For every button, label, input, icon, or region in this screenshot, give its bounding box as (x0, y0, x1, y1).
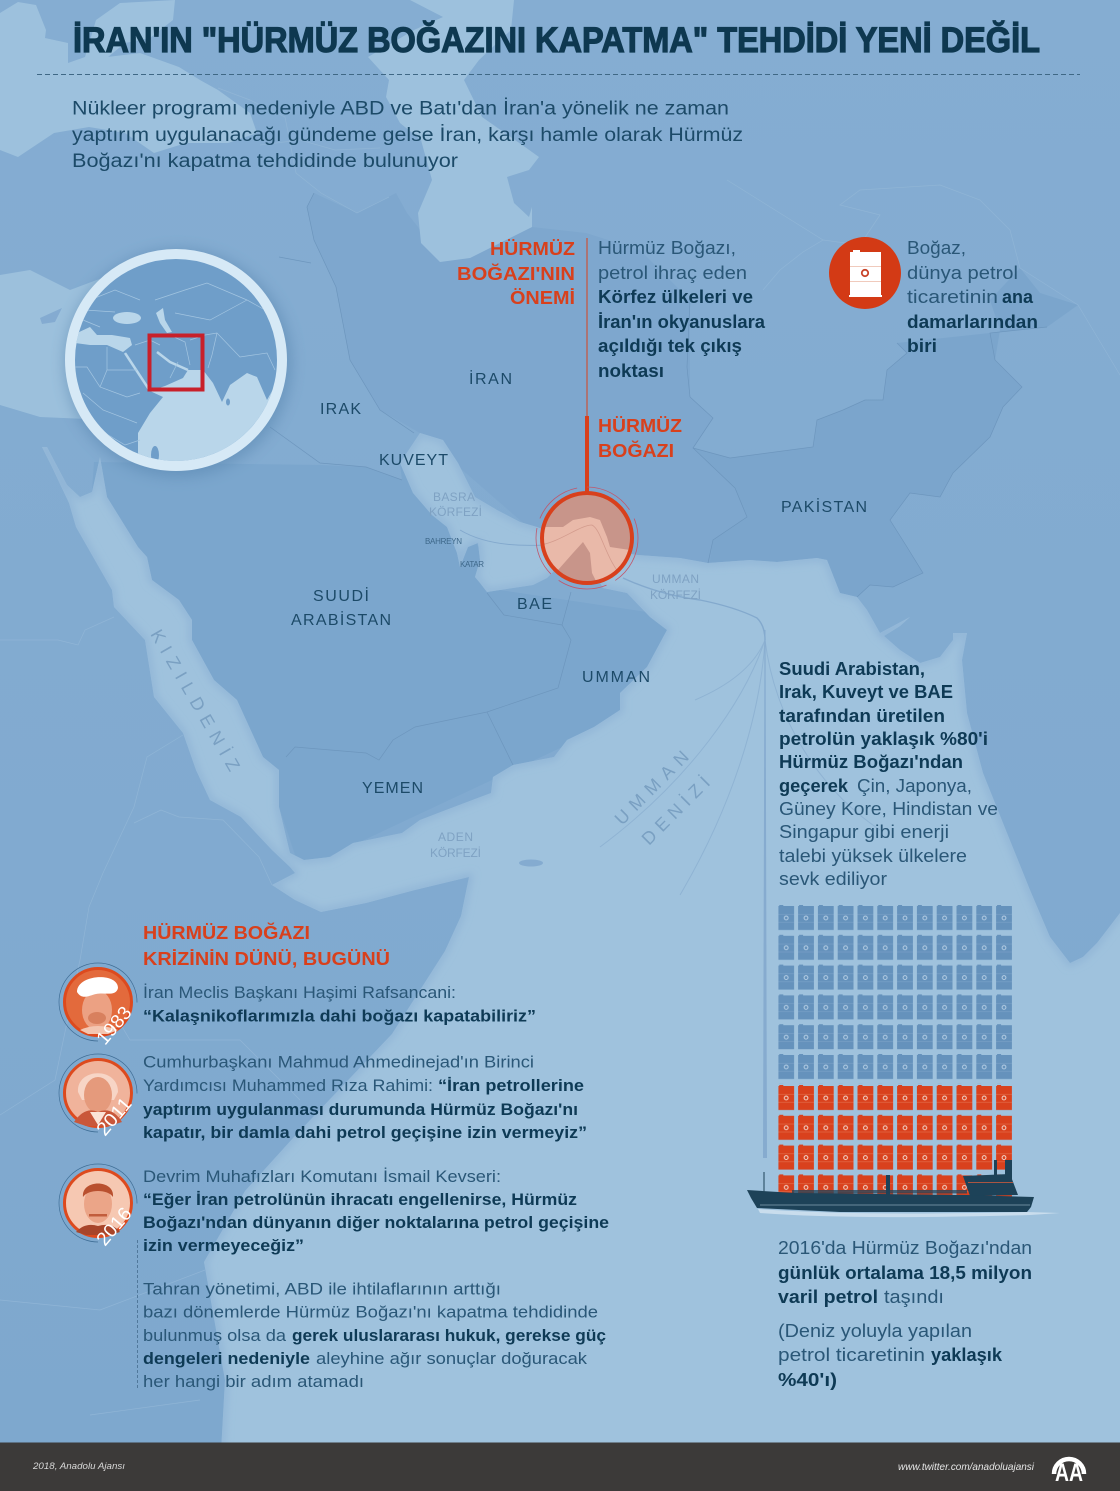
quote: Kevseri: Boğazı'ndan dünyanın diğer noktalarına petrol geçişine (143, 1213, 609, 1232)
text: conclusion: dengeleri nedeniyle (143, 1349, 310, 1368)
text: conclusion: gerek uluslararası hukuk, gerekse güç (292, 1326, 606, 1345)
text: daily oil transit: taşındı (884, 1287, 944, 1307)
heading: importance of the strait: HÜRMÜZ (490, 239, 575, 259)
quote: Rahimi (143, 1052, 587, 1142)
quote: Kevseri: Devrim Muhafızları Komutanı İsmail Kevseri: (143, 1167, 501, 1186)
land: Arabian peninsula (92, 462, 700, 870)
text: world oil trade artery: ticaretinin (907, 287, 998, 307)
text: Gulf oil exports: Güney Kore, Hindistan ve (779, 799, 998, 819)
text: conclusion: Tahran yönetimi, ABD ile ihtilaflarının arttığı (143, 1280, 501, 1298)
sea: Arabian Sea, Persian Gulf and Red Sea (42, 433, 1120, 1470)
sea: Sea of Azov (85, 0, 175, 57)
text: importance of the strait: Körfez ülkeleri ve (598, 287, 753, 307)
heading: crisis past and present: KRİZİNİN DÜNÜ, BUGÜNÜ (143, 949, 390, 969)
quote: Rafsancani: İran Meclis Başkanı Haşimi Rafsancani: (143, 983, 456, 1002)
icon: oil barrel (829, 237, 901, 309)
quote: Rahimi: kapatır, bir damla dahi petrol geçişine izin vermeyiz” (143, 1123, 587, 1142)
text: conclusion: aleyhine ağır sonuçlar doğuracak (316, 1349, 588, 1368)
country labels: ARABİSTAN (291, 610, 391, 629)
icon: Anadolu Agency logo: AA (1055, 1459, 1083, 1487)
text: daily oil transit: %40'ı) (778, 1370, 837, 1390)
text: importance of the strait: açıldığı tek çıkış (598, 336, 742, 356)
text: daily oil transit: yaklaşık (931, 1345, 1003, 1365)
country labels: IRAK (320, 401, 361, 418)
icon: oil tanker (747, 1160, 1060, 1217)
sea: Black Sea (0, 2, 257, 157)
text: daily oil transit: varil petrol (778, 1287, 878, 1307)
text: world oil trade artery: biri (907, 336, 937, 356)
text: daily oil transit: günlük ortalama 18,5 milyon (778, 1263, 1032, 1283)
sea labels: KIZILDENİZ (147, 626, 244, 775)
intro text (72, 98, 743, 172)
year 2011: 2011 (93, 1094, 136, 1140)
sea: Caspian (368, 0, 539, 262)
sea labels: DENİZİ (638, 772, 714, 849)
island: Socotra (519, 860, 543, 866)
quote: Rahimi: yaptırım uygulanması durumunda Hürmüz Boğazı'nı (143, 1100, 578, 1119)
sea labels: KÖRFEZİ (430, 846, 481, 860)
year 1983: 1983 (93, 1003, 136, 1049)
shipping routes (460, 530, 880, 895)
text: Gulf oil exports: sevk ediliyor (779, 869, 887, 889)
text: Gulf oil exports: Suudi Arabistan, (779, 659, 925, 679)
text: Gulf oil exports: Singapur gibi enerji (779, 822, 949, 842)
text: daily oil transit: 2016'da Hürmüz Boğazı'ndan (778, 1238, 1032, 1258)
strait pointer line (585, 238, 589, 494)
text: conclusion: bulunmuş olsa da (143, 1326, 287, 1345)
sea labels: ADEN (438, 830, 473, 844)
sea: Mediterranean (0, 270, 110, 420)
text: Gulf oil exports: Hürmüz Boğazı'ndan (779, 752, 963, 772)
text: Gulf oil exports: petrolün yaklaşık %80'i (779, 729, 988, 749)
portrait 1983 (59, 963, 137, 1041)
quote: Kevseri: “Eğer İran petrolünün ihracatı engellenirse, Hürmüz (143, 1190, 577, 1209)
intro text: yaptırım uygulanacağı gündeme gelse İran, karşı hamle olarak Hürmüz (72, 125, 743, 146)
sea labels: UMMAN (652, 572, 699, 586)
heading: importance of the strait: ÖNEMİ (510, 288, 575, 308)
text: importance of the strait: petrol ihraç eden (598, 263, 747, 283)
Hormuz Strait magnifier (536, 487, 640, 590)
text: daily oil transit: petrol ticaretinin (778, 1345, 925, 1365)
footer twitter link: www.twitter.com/anadoluajansi (898, 1461, 1035, 1473)
heading: crisis past and present (143, 922, 390, 969)
text: daily oil transit: (Deniz yoluyla yapılan (778, 1321, 972, 1341)
land: Iran (307, 193, 747, 575)
label: Hormuz Strait (598, 416, 682, 461)
heading: crisis past and present: HÜRMÜZ BOĞAZI (143, 922, 310, 943)
intro text: Nükleer programı nedeniyle ABD ve Batı'dan İran'a yönelik ne zaman (72, 98, 729, 120)
country labels: UMMAN (582, 669, 650, 686)
text: conclusion: her hangi bir adım atamadı (143, 1372, 364, 1391)
quote: Rafsancani: “Kalaşnikoflarımızla dahi boğazı kapatabiliriz” (143, 1006, 536, 1026)
country labels: PAKİSTAN (781, 497, 867, 516)
quote: Rahimi: Yardımcısı Muhammed Rıza Rahimi: (143, 1076, 433, 1095)
sea labels: KÖRFEZİ (650, 588, 701, 602)
country labels: BAE (517, 596, 552, 613)
country labels: YEMEN (362, 780, 423, 797)
quote: Rafsancani (143, 983, 536, 1026)
footer bar (0, 1442, 1120, 1491)
heading: importance of the strait: BOĞAZI'NIN (457, 263, 575, 284)
text: daily oil transit (778, 1238, 1032, 1390)
text: importance of the strait (598, 238, 766, 381)
text: conclusion: bazı dönemlerde Hürmüz Boğazı'nı kapatma tehdidinde (143, 1302, 598, 1322)
text: Gulf oil exports: tarafından üretilen (779, 706, 945, 726)
year 2016: 2016 (93, 1204, 136, 1250)
country labels: BAHREYN (425, 537, 462, 546)
island: Cyprus (40, 308, 62, 324)
title: İRAN'IN "HÜRMÜZ BOĞAZINI KAPATMA" TEHDİDİ YENİ DEĞİL (73, 20, 1040, 60)
text: world oil trade artery (907, 238, 1038, 356)
country labels: KATAR (460, 560, 484, 569)
locator globe (64, 249, 292, 477)
text: importance of the strait: noktası (598, 361, 664, 381)
text: Gulf oil exports (779, 659, 998, 889)
country labels: KUVEYT (379, 452, 448, 469)
sea labels (147, 490, 714, 860)
text: world oil trade artery: dünya petrol (907, 263, 1018, 283)
text: Gulf oil exports: Çin, Japonya, (857, 776, 972, 796)
text: world oil trade artery: ana (1002, 287, 1034, 307)
text: Gulf oil exports: Irak, Kuveyt ve BAE (779, 682, 953, 702)
quote: Rahimi: Cumhurbaşkanı Mahmud Ahmedinejad'ın Birinci (143, 1052, 534, 1072)
sea labels: UMMAN (611, 747, 693, 829)
footer credit: 2018, Anadolu Ajansı (32, 1461, 125, 1472)
heading: importance of the strait (457, 239, 575, 308)
text: world oil trade artery: Boğaz, (907, 238, 966, 258)
red locator box (150, 336, 202, 390)
sea labels: KÖRFEZİ (429, 505, 482, 519)
text: Gulf oil exports: talebi yüksek ülkelere (779, 846, 967, 866)
route trunk line (763, 630, 767, 1158)
sea labels: BASRA (433, 490, 475, 504)
borders (270, 193, 1047, 765)
label: Hormuz Strait: HÜRMÜZ (598, 416, 682, 436)
text: importance of the strait: İran'ın okyanuslara (598, 312, 766, 332)
label: Hormuz Strait: BOĞAZI (598, 440, 674, 461)
text: conclusion (143, 1280, 606, 1391)
quote: Rahimi: “İran petrollerine (438, 1076, 584, 1095)
land: Pakistan (693, 268, 1078, 597)
text: Gulf oil exports: geçerek (779, 776, 849, 796)
intro text: Boğazı'nı kapatma tehdidinde bulunuyor (72, 151, 459, 172)
portrait 2011 (59, 1054, 137, 1132)
text: world oil trade artery: damarlarından (907, 312, 1038, 332)
text: importance of the strait: Hürmüz Boğazı, (598, 238, 736, 258)
country labels: İRAN (469, 369, 512, 388)
country labels: SUUDİ (313, 586, 369, 605)
quote: Kevseri (143, 1167, 609, 1255)
country labels (291, 369, 867, 797)
barrel grid chart (778, 905, 1013, 1204)
portrait 2016 (59, 1164, 137, 1242)
quote: Kevseri: izin vermeyeceğiz” (143, 1236, 304, 1255)
